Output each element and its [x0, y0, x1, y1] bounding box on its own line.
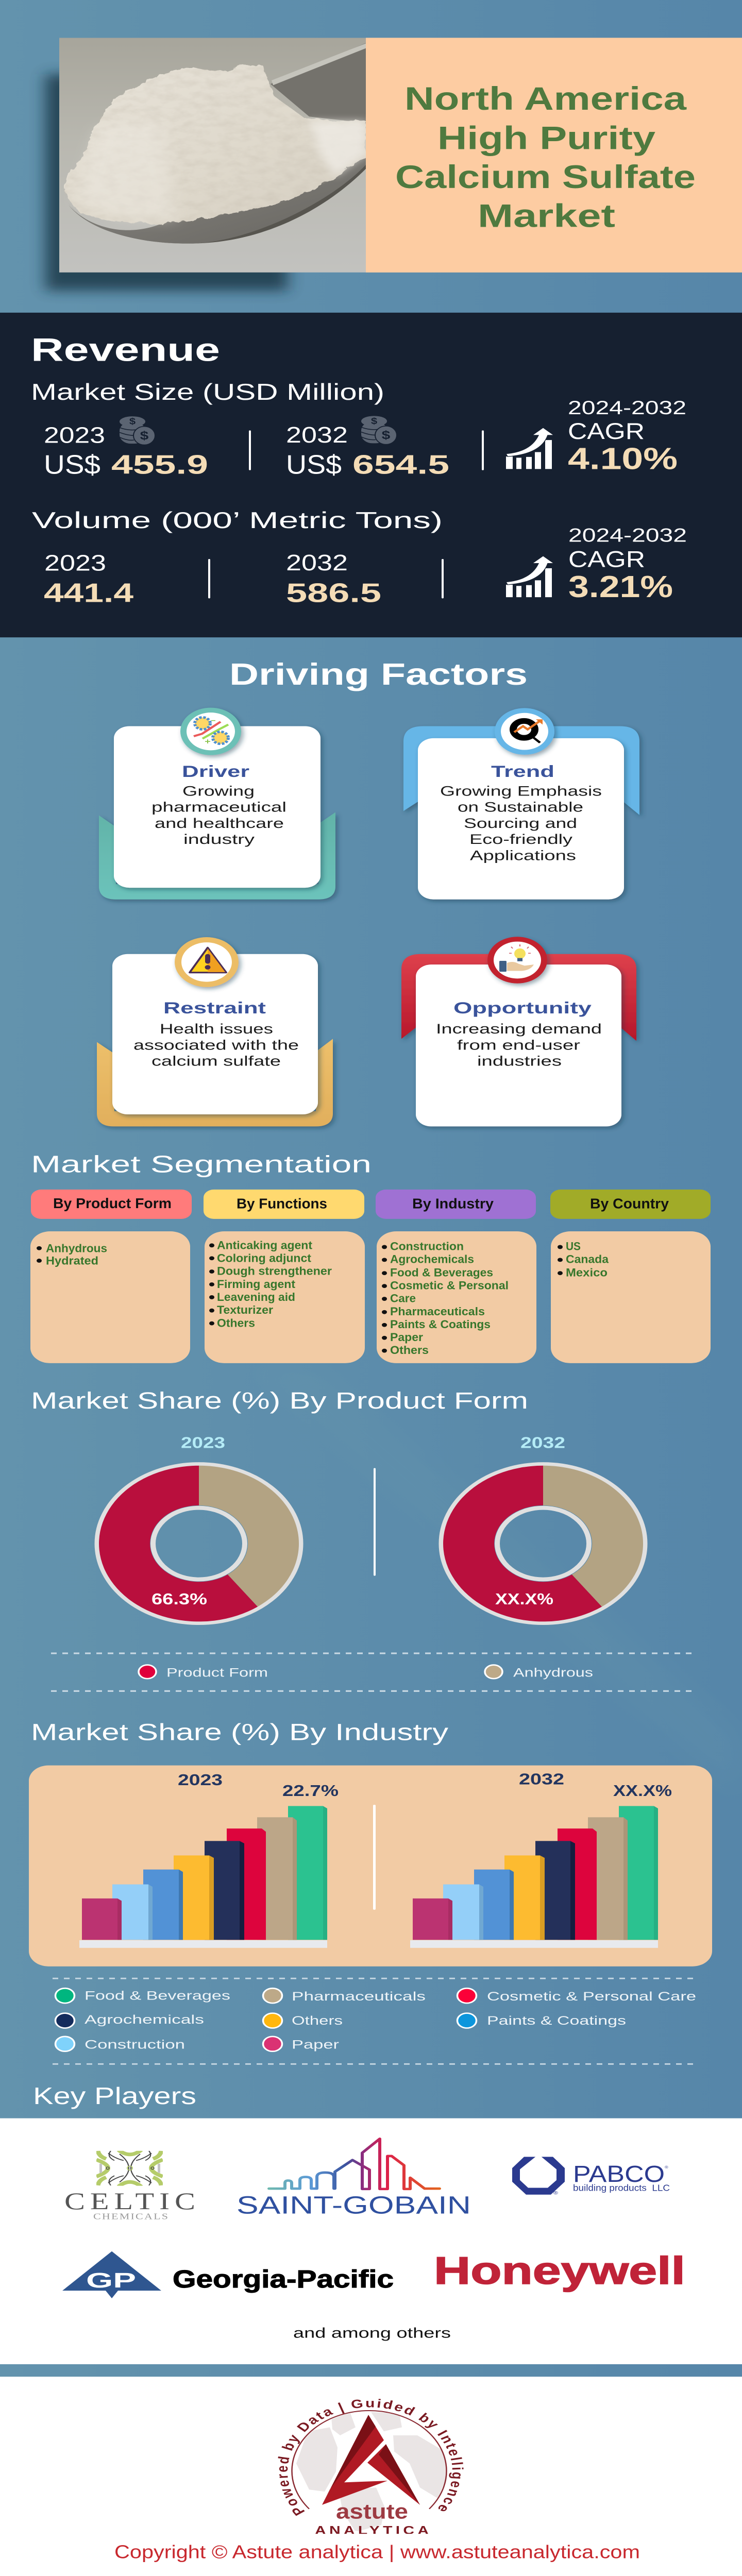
segment: by industry: Pharmaceuticals: [390, 1304, 485, 1318]
logo: saint-gobain: [237, 2139, 471, 2219]
background diagonal light streak: [247, 1366, 742, 1801]
volume 2023: [44, 551, 134, 608]
footer panel: [0, 2377, 742, 2576]
logo: pabco: PABCO: [573, 2161, 665, 2187]
logo: astute analytica: [278, 2399, 464, 2534]
title panel: [366, 38, 742, 273]
hero banner: [45, 38, 742, 291]
trend text: Growing Emphasis: [440, 783, 602, 799]
hero photo: powder on a scoop: [59, 38, 366, 273]
heading: revenue: Revenue: [31, 332, 220, 368]
segment: by functions: Others: [217, 1316, 255, 1330]
panel: restraint: [97, 937, 333, 1126]
legend: anhydrous: Anhydrous: [513, 1666, 593, 1680]
legend: industry: Pharmaceuticals: [292, 1989, 426, 2003]
market size 2023: [44, 422, 208, 480]
trend text: Sourcing and: [464, 816, 577, 831]
opportunity text: Increasing demand: [436, 1021, 602, 1037]
legend: industry: Paper: [292, 2038, 339, 2052]
panel: industry charts: [29, 1766, 712, 1967]
donut chart 2023: [97, 1464, 301, 1623]
volume CAGR: 3.21%: [568, 570, 673, 604]
driver heading: Driver: [182, 762, 249, 781]
market size CAGR: CAGR: [568, 418, 645, 444]
logo: georgia-pacific: [62, 2251, 394, 2298]
logo wordmark astute: astute: [336, 2500, 408, 2523]
logo: celtic chemicals: [64, 2150, 195, 2222]
legend: industry: Others: [292, 2013, 343, 2027]
driver text: and healthcare: [155, 816, 284, 831]
segment: by industry: Paints & Coatings: [390, 1317, 491, 1331]
logo: celtic chemicals: CHEMICALS: [93, 2212, 168, 2222]
icon: coins 2032: [361, 416, 397, 445]
segment: by functions: Texturizer: [217, 1303, 273, 1316]
segment: by industry: By Industry: [412, 1195, 494, 1212]
legend: industry: Food & Beverages: [85, 1989, 230, 2003]
logo: saint-gobain: SAINT-GOBAIN: [237, 2191, 471, 2219]
donut chart 2032: [441, 1464, 645, 1623]
segment: by functions: Leavening aid: [217, 1290, 295, 1303]
divider: [208, 559, 210, 598]
text: and among others: and among others: [293, 2325, 451, 2341]
opportunity text: industries: [477, 1053, 562, 1069]
market size 2032: 2032: [286, 422, 348, 447]
driver text: Growing: [182, 783, 255, 799]
title: Market: [478, 198, 615, 234]
logo tagline: Powered by Data | Guided by Intelligence: [278, 2399, 464, 2516]
icon: growth arrow: [506, 556, 554, 597]
segment: by country: US: [566, 1240, 581, 1253]
market size 2023: 2023: [44, 422, 105, 448]
volume 2023: 441.4: [44, 578, 134, 608]
icon: coins 2023: [120, 416, 155, 445]
logo: pabco: building products LLC: [573, 2183, 670, 2193]
year label 2032: 2032: [519, 1770, 564, 1788]
icon: growth arrow: [506, 428, 554, 469]
trend text: [440, 783, 602, 863]
legend: industry: Paints & Coatings: [487, 2013, 626, 2027]
heading: market segmentation: Market Segmentation: [31, 1151, 372, 1178]
legend: industry: Cosmetic & Personal Care: [487, 1989, 696, 2003]
market size CAGR: 4.10%: [568, 442, 678, 476]
segment: by industry: Food & Beverages: [390, 1266, 493, 1279]
segment: by country: By Country: [590, 1195, 669, 1212]
driver text: [151, 783, 286, 847]
volume CAGR: CAGR: [568, 547, 645, 572]
driver text: pharmaceutical: [151, 799, 286, 815]
title: High Purity: [437, 120, 655, 156]
volume 2032: [286, 550, 381, 608]
bar chart 2023: [79, 1806, 327, 1948]
legend: industry: Agrochemicals: [85, 2012, 204, 2026]
market size CAGR: [568, 397, 686, 476]
value label: XX.X%: [613, 1782, 672, 1800]
trend text: Applications: [470, 848, 576, 863]
icon: coins 2023: $: [129, 417, 136, 427]
segment: by functions: By Functions: [237, 1195, 327, 1212]
opportunity text: from end-user: [457, 1037, 580, 1053]
logo: pabco: [512, 2156, 670, 2196]
segment: by industry: Construction: [390, 1240, 464, 1253]
icon: driver: [180, 708, 241, 755]
segment: by product form: Hydrated: [46, 1254, 98, 1267]
market size CAGR: 2024-2032: [568, 397, 686, 418]
market size 2023: US$: [44, 450, 100, 480]
restraint heading: Restraint: [163, 999, 266, 1017]
legend: industry: [56, 1988, 696, 2052]
segment: by industry: Paper: [390, 1330, 423, 1344]
center divider: [373, 1805, 376, 1910]
icon: coins 2023: $: [140, 429, 148, 443]
divider: [249, 430, 251, 470]
icon: opportunity: [487, 937, 547, 984]
copyright: Copyright © Astute analytica | www.astuteanalytica.com: [114, 2541, 640, 2563]
trend text: Eco-friendly: [469, 832, 572, 847]
segment: by industry: [376, 1190, 536, 1363]
divider: [442, 559, 444, 598]
volume 2023: 2023: [44, 551, 106, 575]
logo: georgia-pacific: Georgia-Pacific: [173, 2265, 394, 2293]
hero shadow: [45, 74, 288, 291]
legend: product form: Product Form: [166, 1666, 268, 1680]
segment: by functions: Dough strengthener: [217, 1264, 332, 1277]
logo wordmark analytica: ANALYTICA: [315, 2523, 429, 2537]
trend text: on Sustainable: [458, 799, 583, 815]
restraint text: calcium sulfate: [151, 1053, 281, 1069]
heading: driving factors: Driving Factors: [229, 657, 528, 691]
heading: market share by industry: Market Share (%) By Industry: [31, 1720, 448, 1745]
legend: industry: Construction: [85, 2038, 185, 2052]
segment: by industry: Agrochemicals: [390, 1252, 474, 1266]
bar chart 2032: [410, 1806, 658, 1948]
donut chart 2032: XX.X%: [495, 1590, 553, 1608]
logo: pabco: ®: [553, 2191, 558, 2196]
driver text: industry: [183, 832, 255, 847]
logo: georgia-pacific: GP: [86, 2268, 136, 2292]
segment: by country: Canada: [566, 1252, 609, 1266]
opportunity text: [436, 1021, 602, 1069]
year label 2023: 2023: [181, 1434, 225, 1451]
panel: trend: [403, 708, 639, 900]
segment: by industry: Cosmetic & Personal: [390, 1278, 509, 1292]
market size 2032: [286, 422, 449, 480]
center divider: [374, 1468, 376, 1576]
icon: coins 2032: $: [371, 416, 377, 426]
logo: honeywell: Honeywell: [434, 2249, 685, 2292]
segment: by functions: Firming agent: [217, 1277, 295, 1291]
value label: 22.7%: [282, 1782, 339, 1800]
market size 2032: 654.5: [352, 450, 449, 480]
icon: coins 2032: $: [382, 429, 390, 442]
restraint text: associated with the: [133, 1037, 299, 1053]
heading: key players: Key Players: [33, 2082, 196, 2110]
segment: by functions: Coloring adjunct: [217, 1251, 311, 1265]
volume CAGR: [568, 524, 687, 604]
panel: driver: [99, 708, 335, 900]
icon: restraint: [175, 937, 239, 987]
title: [395, 80, 696, 234]
volume CAGR: 2024-2032: [568, 524, 687, 546]
panel: revenue: [0, 313, 742, 637]
segment: by country: [550, 1190, 711, 1363]
segment: by product form: Anhydrous: [46, 1242, 107, 1255]
volume sub-heading: Volume (000’ Metric Tons): [32, 507, 443, 533]
opportunity heading: Opportunity: [453, 999, 592, 1017]
segment: by functions: [204, 1190, 365, 1363]
segment: by industry: Care: [390, 1291, 416, 1305]
restraint text: Health issues: [160, 1021, 273, 1037]
heading: market share by product form: Market Share (%) By Product Form: [31, 1388, 528, 1414]
title: Calcium Sulfate: [395, 159, 696, 195]
year label 2032: 2032: [520, 1434, 565, 1451]
market size 2023: 455.9: [111, 450, 208, 480]
title: North America: [404, 80, 687, 117]
segment: by industry: Others: [390, 1343, 429, 1357]
segment: by product form: By Product Form: [53, 1195, 172, 1211]
restraint text: [133, 1021, 299, 1069]
market size 2032: US$: [286, 450, 342, 480]
volume 2032: 2032: [286, 550, 348, 575]
donut chart 2023: 66.3%: [151, 1590, 207, 1608]
panel: key players logos: [0, 2119, 742, 2364]
segment: by functions: Anticaking agent: [217, 1238, 312, 1252]
volume 2032: 586.5: [286, 578, 381, 608]
segment: by product form: [30, 1190, 192, 1363]
icon: trend: [495, 708, 554, 755]
market size sub-heading: Market Size (USD Million): [31, 379, 384, 405]
legend: anhydrous: [485, 1665, 593, 1680]
divider: [482, 430, 484, 470]
year label 2023: 2023: [178, 1771, 223, 1789]
trend heading: Trend: [491, 762, 554, 781]
panel: opportunity: [401, 937, 636, 1126]
segment: by country: Mexico: [566, 1266, 608, 1279]
logo: celtic chemicals: CELTIC: [64, 2188, 195, 2214]
logo: pabco: ®: [665, 2165, 668, 2170]
